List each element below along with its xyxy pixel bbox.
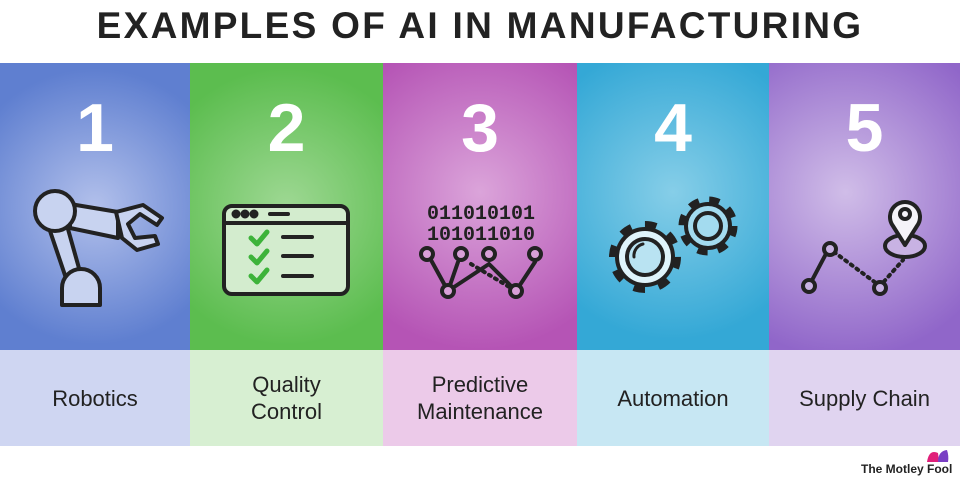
label: automation — [577, 350, 769, 446]
panel: automation — [577, 63, 769, 350]
number 4: 4 — [654, 90, 692, 166]
number 2: 2 — [268, 90, 305, 166]
icon: binary network: 011010101 — [427, 203, 535, 226]
icon: gears — [614, 201, 733, 288]
icon: binary network: 101011010 — [427, 224, 535, 247]
icon: checklist window — [224, 206, 348, 294]
logo: The Motley Fool: The Motley Fool — [861, 462, 952, 476]
label: robotics — [0, 350, 190, 446]
label: predictive maintenance — [383, 350, 577, 446]
label: robotics: Robotics — [52, 386, 138, 410]
title: EXAMPLES OF AI IN MANUFACTURING — [97, 5, 863, 46]
logo: The Motley Fool — [861, 450, 952, 476]
label: automation: Automation — [617, 386, 729, 410]
label: supply chain — [769, 350, 960, 446]
icon: route with map pin — [803, 202, 925, 294]
label: supply chain: Supply Chain — [799, 386, 930, 410]
label: predictive maintenance: Maintenance — [417, 399, 543, 424]
label: quality control: Quality — [252, 372, 321, 397]
panel: robotics — [0, 63, 190, 350]
number 1: 1 — [76, 90, 114, 166]
icon: jester hat — [927, 450, 948, 462]
icon: robot arm — [35, 191, 162, 305]
label: quality control: Control — [251, 399, 322, 424]
number 5: 5 — [846, 90, 883, 166]
panel: supply chain — [769, 63, 960, 350]
label: quality control — [190, 350, 383, 446]
icon: binary network — [421, 203, 541, 297]
number 3: 3 — [461, 90, 499, 166]
panel: quality control — [190, 63, 383, 350]
panel: predictive maintenance — [383, 63, 577, 350]
label: predictive maintenance: Predictive — [432, 372, 528, 397]
